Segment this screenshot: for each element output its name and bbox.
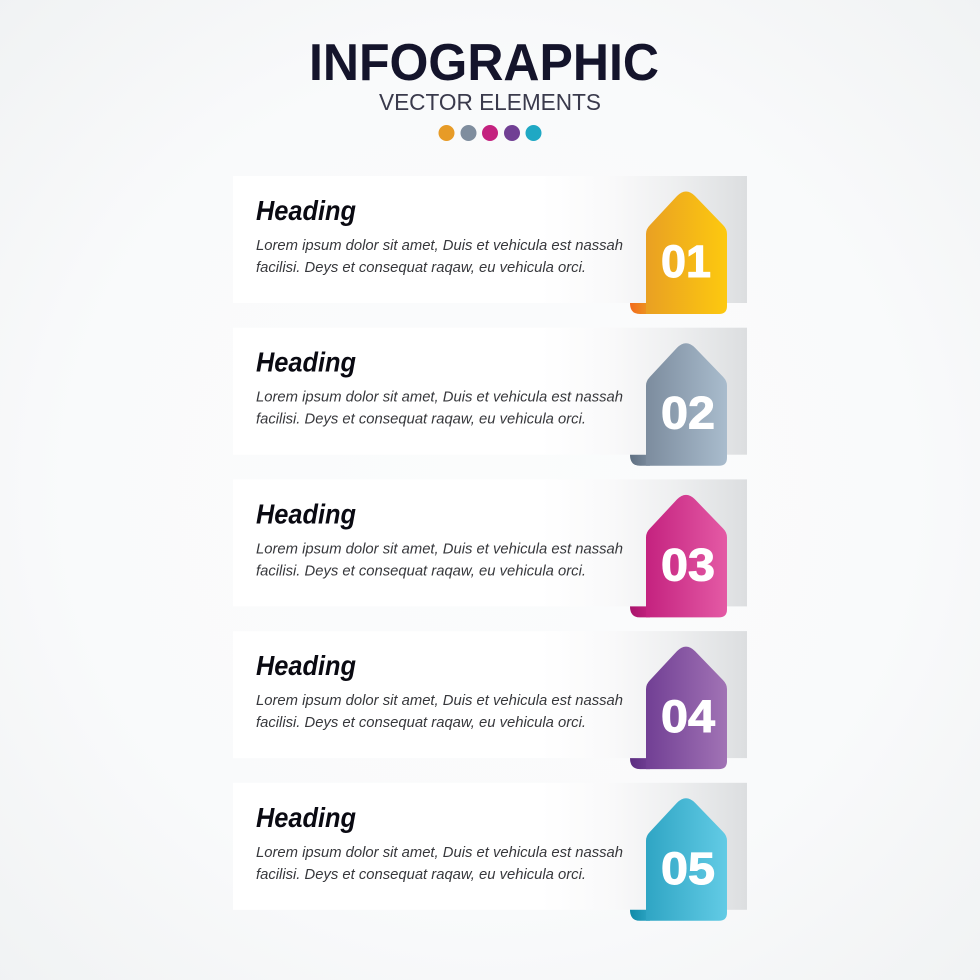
subtitle: VECTOR ELEMENTS — [379, 89, 601, 115]
panel: step 04 — [233, 631, 747, 769]
panel: step 01 — [233, 176, 747, 314]
body text 03 — [256, 540, 623, 579]
body text 02: Lorem ipsum dolor sit amet, Duis et vehicula est nassah — [256, 389, 623, 406]
body text 02: facilisi. Deys et consequat raqaw, eu vehicula orci. — [256, 411, 586, 428]
title: INFOGRAPHIC — [309, 34, 659, 92]
body text 01 — [256, 237, 623, 276]
body text 01: Lorem ipsum dolor sit amet, Duis et vehicula est nassah — [256, 237, 623, 254]
number 02: 02 — [661, 388, 715, 439]
body text 05: facilisi. Deys et consequat raqaw, eu vehicula orci. — [256, 866, 586, 883]
tag 05 — [630, 798, 727, 921]
colour dots — [438, 125, 542, 141]
tag 02 — [630, 343, 727, 466]
number 01: 01 — [661, 236, 711, 287]
heading 05: Heading — [256, 802, 356, 833]
heading 04: Heading — [256, 650, 356, 681]
body text 03: Lorem ipsum dolor sit amet, Duis et vehicula est nassah — [256, 540, 623, 557]
body text 05: Lorem ipsum dolor sit amet, Duis et vehicula est nassah — [256, 844, 623, 861]
panel: step 03 — [233, 479, 747, 617]
body text 05 — [256, 844, 623, 883]
body text 03: facilisi. Deys et consequat raqaw, eu vehicula orci. — [256, 562, 586, 579]
heading 03: Heading — [256, 498, 356, 529]
number 03: 03 — [661, 539, 715, 590]
number 05: 05 — [661, 843, 715, 894]
tag 03 — [630, 495, 727, 617]
body text 04 — [256, 692, 623, 731]
body text 02 — [256, 389, 623, 428]
tag 04 — [630, 647, 727, 769]
heading 01: Heading — [256, 195, 356, 226]
panel: step 05 — [233, 783, 747, 921]
heading 02: Heading — [256, 347, 356, 378]
body text 04: Lorem ipsum dolor sit amet, Duis et vehicula est nassah — [256, 692, 623, 709]
panel: step 02 — [233, 328, 747, 466]
number 04: 04 — [661, 691, 715, 742]
body text 04: facilisi. Deys et consequat raqaw, eu vehicula orci. — [256, 714, 586, 731]
tag 01 — [630, 192, 727, 314]
body text 01: facilisi. Deys et consequat raqaw, eu vehicula orci. — [256, 259, 586, 276]
